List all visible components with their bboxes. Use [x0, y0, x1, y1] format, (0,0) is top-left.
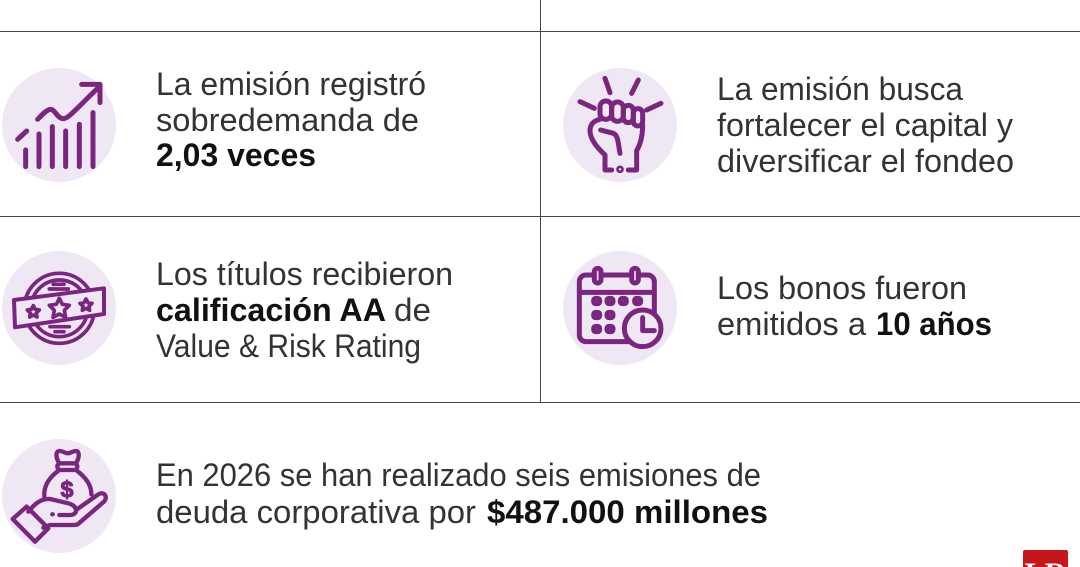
text: capital: diversificar el fondeo — [717, 143, 1014, 179]
text: calificación: calificación AA — [156, 292, 386, 328]
text: capital: La emisión busca — [717, 71, 963, 107]
text: sobredemanda: 2,03 veces — [156, 137, 316, 173]
text: plazo: 10 años — [876, 306, 992, 342]
icon: hand with money bag: $ — [61, 477, 74, 503]
text: calificación: Value & Risk Rating — [156, 328, 421, 364]
icon: hand with money bag — [2, 439, 116, 553]
panel: calificación — [2, 251, 453, 365]
text: emisiones 2026: deuda corporativa por — [156, 494, 476, 530]
text: sobredemanda: La emisión registró — [156, 66, 426, 102]
text: sobredemanda — [156, 66, 426, 173]
icon: calendar and clock — [563, 251, 677, 365]
text: plazo: Los bonos fueron — [717, 270, 967, 306]
logo: LR — [1023, 550, 1068, 567]
text: emisiones 2026: En 2026 se han realizado seis emisiones de — [156, 457, 761, 493]
icon: rating seal — [2, 251, 116, 365]
text: plazo: emitidos a — [717, 306, 866, 342]
text: calificación: Los títulos recibieron — [156, 256, 453, 292]
text: capital — [717, 71, 1014, 179]
panel: sobredemanda — [2, 66, 426, 182]
text: capital: fortalecer el capital y — [717, 107, 1013, 143]
panel: capital — [563, 68, 1014, 182]
text: sobredemanda: sobredemanda de — [156, 102, 419, 138]
text: calificación — [156, 256, 453, 364]
text: plazo — [717, 270, 992, 342]
text: emisiones 2026 — [156, 457, 768, 530]
icon: raised fist — [563, 68, 677, 182]
text: calificación: de — [394, 292, 431, 328]
panel: plazo — [563, 251, 992, 365]
panel: emisiones 2026 — [2, 439, 768, 553]
text: emisiones 2026: $487.000 millones — [487, 494, 768, 530]
icon: growth chart — [2, 68, 116, 182]
